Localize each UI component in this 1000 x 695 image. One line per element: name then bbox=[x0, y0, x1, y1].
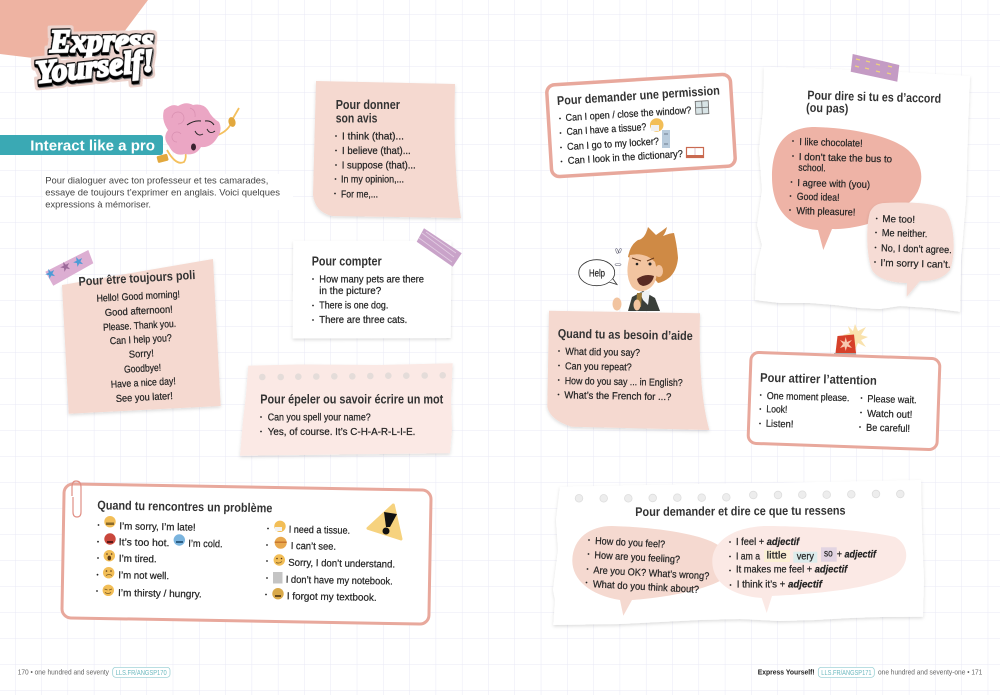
banner: Interact like a pro: Interact like a pro bbox=[30, 137, 155, 154]
panel: Pour attirer l'attention bbox=[748, 324, 940, 450]
list: spelling phrases: Yes, of course. It’s C-H-A-R-L-I-E. bbox=[268, 427, 415, 438]
list: problems left column: I’m sorry, I’m late! bbox=[119, 521, 196, 534]
heading: Pour donner son avis: Pour donner bbox=[336, 98, 400, 112]
list: counting phrases bbox=[312, 274, 424, 326]
heading: Pour être toujours poli: Pour être toujours poli bbox=[78, 268, 196, 289]
speech bubble: feelings: I feel + adjectif bbox=[736, 537, 801, 548]
list: problems left column: I’m cold. bbox=[188, 539, 223, 550]
list: problems right column bbox=[265, 521, 395, 604]
list: polite phrases bbox=[96, 289, 180, 405]
banner: Interact like a pro bbox=[0, 135, 163, 155]
chip: very: very bbox=[797, 551, 814, 562]
icon: siren bbox=[834, 324, 868, 358]
heading: Pour dire si tu es d'accord bbox=[806, 88, 941, 116]
intro text: Pour dialoguer avec ton professeur et tes camarades, bbox=[45, 175, 268, 186]
list: problems left column: I’m thirsty / hungry. bbox=[118, 588, 202, 600]
tape: stars: ★ bbox=[70, 252, 87, 271]
list: problems right column: I can’t see. bbox=[291, 541, 336, 553]
list: help phrases: What did you say? bbox=[565, 347, 641, 359]
heading: Pour dire si tu es d'accord: Pour dire si tu es d’accord bbox=[807, 88, 941, 106]
list: attention right column: Please wait. bbox=[867, 394, 917, 406]
list: opinions: For me,... bbox=[341, 189, 378, 200]
icon: locker bbox=[662, 130, 670, 148]
list: spelling phrases: Can you spell your name? bbox=[268, 413, 371, 424]
list: opinions: I think (that)... bbox=[342, 131, 404, 142]
list: polite phrases: Hello! Good morning! bbox=[96, 289, 180, 305]
speech bubble: agree: Good idea! bbox=[797, 192, 840, 204]
list: attention right column: Watch out! bbox=[867, 409, 912, 421]
heading: Pour épeler: Pour épeler ou savoir écrire un mot bbox=[260, 393, 444, 407]
list: problems left column bbox=[96, 516, 223, 600]
list: polite phrases: Please. Thank you. bbox=[103, 319, 176, 334]
chip: little bbox=[764, 550, 790, 562]
speech bubble: agree bbox=[772, 127, 921, 250]
notebook holes bbox=[575, 490, 904, 502]
footer: left page bbox=[18, 667, 170, 677]
list: help phrases: Can you repeat? bbox=[565, 361, 632, 373]
list: permission phrases: Can I open / close the window? bbox=[565, 105, 692, 124]
list: polite phrases: Sorry! bbox=[129, 348, 154, 361]
title: Express Yourself!: Express bbox=[49, 21, 154, 59]
speech bubble: feelings: I am a bbox=[736, 551, 760, 562]
heading: Pour donner son avis bbox=[336, 98, 400, 126]
notebook holes bbox=[259, 372, 446, 380]
chip: little: little bbox=[767, 550, 787, 561]
list: polite phrases: Have a nice day! bbox=[111, 376, 176, 391]
title: Express Yourself! bbox=[34, 21, 156, 90]
list: attention left column: Look! bbox=[766, 404, 788, 416]
list: counting phrases: There are three cats. bbox=[319, 315, 407, 326]
heading: Pour demander une permission: Pour demander une permission bbox=[557, 84, 720, 108]
icon: book bbox=[686, 148, 704, 158]
panel: Pour demander une permission bbox=[546, 74, 736, 177]
intro text bbox=[43, 174, 293, 210]
speech bubble: questions bbox=[572, 526, 722, 616]
list: problems right column: I need a tissue. bbox=[289, 525, 350, 537]
speech bubble: feelings bbox=[712, 526, 906, 613]
list: polite phrases: Can I help you? bbox=[110, 333, 172, 347]
intro text: essaye de toujours t’exprimer en anglais. Voici quelques bbox=[45, 187, 280, 198]
chip: so: so bbox=[824, 549, 833, 560]
panel: Pour compter bbox=[293, 228, 462, 338]
heading: Pour compter: Pour compter bbox=[312, 255, 382, 269]
speech bubble: questions: Are you OK? What’s wrong? bbox=[593, 565, 710, 582]
panel: Pour donner son avis bbox=[313, 81, 461, 218]
speech bubble: disagree: I’m sorry I can’t. bbox=[880, 258, 951, 271]
list: spelling phrases bbox=[260, 413, 415, 438]
chip: so bbox=[821, 547, 837, 562]
heading: Pour demander et dire ce que tu ressens: Pour demander et dire ce que tu ressens bbox=[635, 504, 846, 519]
icon: warning triangle bbox=[368, 505, 401, 539]
heading: Pour dire si tu es d'accord: (ou pas) bbox=[806, 101, 849, 116]
speech bubble: disagree: No, I don’t agree. bbox=[881, 243, 952, 256]
list: problems left column: I’m tired. bbox=[119, 554, 157, 565]
list: counting phrases: How many pets are there bbox=[319, 274, 424, 285]
title: Express Yourself!: Yourself! bbox=[34, 42, 156, 90]
tape: stars bbox=[42, 250, 93, 286]
icon: tissue face bbox=[650, 118, 664, 132]
list: counting phrases: There is one dog. bbox=[319, 301, 388, 312]
list: problems right column: Sorry, I don’t understand. bbox=[288, 558, 395, 571]
tape: dotted purple bbox=[851, 54, 899, 82]
speech bubble: questions: What do you think about? bbox=[593, 579, 700, 596]
list: polite phrases: Goodbye! bbox=[124, 363, 161, 376]
heading: Quand tu as besoin d'aide: Quand tu as besoin d’aide bbox=[558, 327, 693, 343]
speech bubble: feelings: I think it’s + adjectif bbox=[737, 580, 824, 591]
list: opinions: In my opinion,... bbox=[341, 175, 404, 186]
list: opinions: I suppose (that)... bbox=[342, 161, 416, 172]
list: problems left column: It’s too hot. bbox=[119, 537, 170, 549]
speech bubble: agree: I agree with (you) bbox=[797, 178, 870, 191]
list: permission phrases: Can I go to my locker? bbox=[567, 136, 660, 153]
icon: brain mascot bbox=[156, 103, 239, 163]
speech bubble: disagree: Me neither. bbox=[882, 228, 928, 240]
list: help phrases bbox=[558, 347, 683, 403]
list: permission phrases: Can I have a tissue? bbox=[566, 122, 647, 138]
footer: right page: one hundred and seventy-one • 171 bbox=[878, 668, 982, 677]
speech bubble: disagree bbox=[867, 203, 954, 297]
speech bubble: feelings: + adjectif bbox=[837, 549, 877, 560]
list: opinions: I believe (that)... bbox=[342, 146, 411, 157]
tape: purple bbox=[417, 228, 462, 267]
speech bubble: questions: How do you feel? bbox=[595, 536, 666, 551]
list: attention left column: One moment please. bbox=[767, 391, 850, 404]
list: polite phrases: Good afternoon! bbox=[105, 304, 173, 319]
list: counting phrases: in the picture? bbox=[319, 286, 382, 297]
heading: Quand tu rencontres: Quand tu rencontres un problème bbox=[97, 498, 272, 515]
list: help phrases: What’s the French for ...? bbox=[564, 390, 672, 403]
speech bubble: agree: With pleasure! bbox=[796, 206, 855, 219]
speech bubble: agree: I like chocolate! bbox=[799, 137, 863, 150]
list: problems left column: I’m not well. bbox=[118, 570, 169, 582]
list: help phrases: How do you say ... in English? bbox=[565, 376, 683, 389]
speech bubble: questions: How are you feeling? bbox=[594, 550, 681, 566]
heading: Pour attirer l'attention: Pour attirer l’attention bbox=[760, 371, 877, 388]
panel: Pour demander et dire ce que tu ressens bbox=[553, 480, 924, 625]
intro text: expressions à mémoriser. bbox=[45, 199, 151, 210]
list: opinions bbox=[334, 131, 416, 200]
corner background shape bbox=[0, 0, 148, 58]
heading: Pour donner son avis: son avis bbox=[336, 112, 377, 126]
list: polite phrases: See you later! bbox=[116, 391, 173, 405]
panel: Pour être toujours poli bbox=[42, 250, 221, 414]
panel: Quand tu as besoin d'aide bbox=[547, 311, 709, 430]
icon: paperclip bbox=[72, 481, 81, 517]
tape: stars: ★ bbox=[42, 264, 59, 283]
list: permission phrases bbox=[559, 105, 692, 167]
illustration: boy asking for help bbox=[579, 227, 678, 311]
list: permission phrases: Can I look in the dictionary? bbox=[568, 149, 684, 167]
panel: Quand tu rencontres un problème bbox=[62, 481, 431, 624]
speech bubble: disagree: Me too! bbox=[882, 214, 915, 226]
footer: right page bbox=[758, 667, 982, 677]
speech bubble: agree: I don’t take the bus to bbox=[799, 152, 893, 165]
list: attention right column: Be careful! bbox=[866, 423, 910, 435]
list: attention left column bbox=[759, 391, 850, 430]
footer: left page: LLS.FR/ANGSP170 bbox=[116, 668, 167, 677]
list: problems right column: I forgot my textbook. bbox=[287, 591, 377, 604]
tape: stars: ★ bbox=[57, 257, 74, 276]
speech bubble: agree: school. bbox=[798, 163, 826, 174]
footer: right page: Express Yourself! bbox=[758, 668, 815, 677]
speech bubble: feelings: It makes me feel + adjectif bbox=[736, 565, 849, 576]
list: attention right column bbox=[859, 394, 917, 435]
panel: Pour épeler ou savoir écrire un mot bbox=[240, 363, 453, 456]
illustration: boy asking for help: Help bbox=[589, 269, 605, 280]
icon: window bbox=[695, 101, 709, 114]
list: problems right column: I don’t have my notebook. bbox=[286, 575, 393, 588]
panel: Pour dire si tu es d'accord bbox=[755, 54, 970, 312]
list: attention left column: Listen! bbox=[766, 419, 794, 430]
footer: left page: 170 • one hundred and seventy bbox=[18, 668, 109, 677]
footer: right page: LLS.FR/ANGSP171 bbox=[821, 668, 872, 677]
